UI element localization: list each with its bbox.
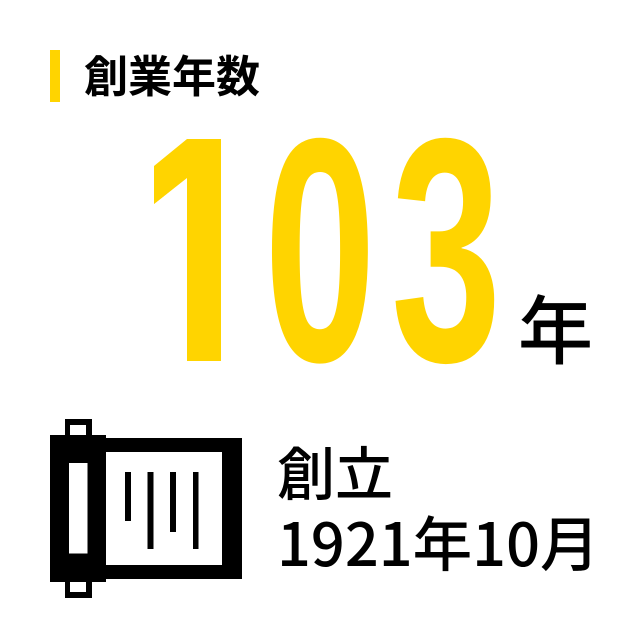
- heading: 創業年数: [84, 41, 260, 105]
- heading accent bar: [50, 50, 60, 102]
- big number: 103: [154, 138, 494, 364]
- unit: years: 年: [518, 271, 593, 380]
- founding label: 創立: [277, 428, 393, 512]
- icon: scroll: [50, 419, 242, 598]
- big number: 103: 0: [264, 71, 376, 429]
- big number: 103: 1: [132, 70, 265, 430]
- founding date: 1921年10月: [277, 498, 600, 584]
- big number: 103: 3: [391, 73, 501, 429]
